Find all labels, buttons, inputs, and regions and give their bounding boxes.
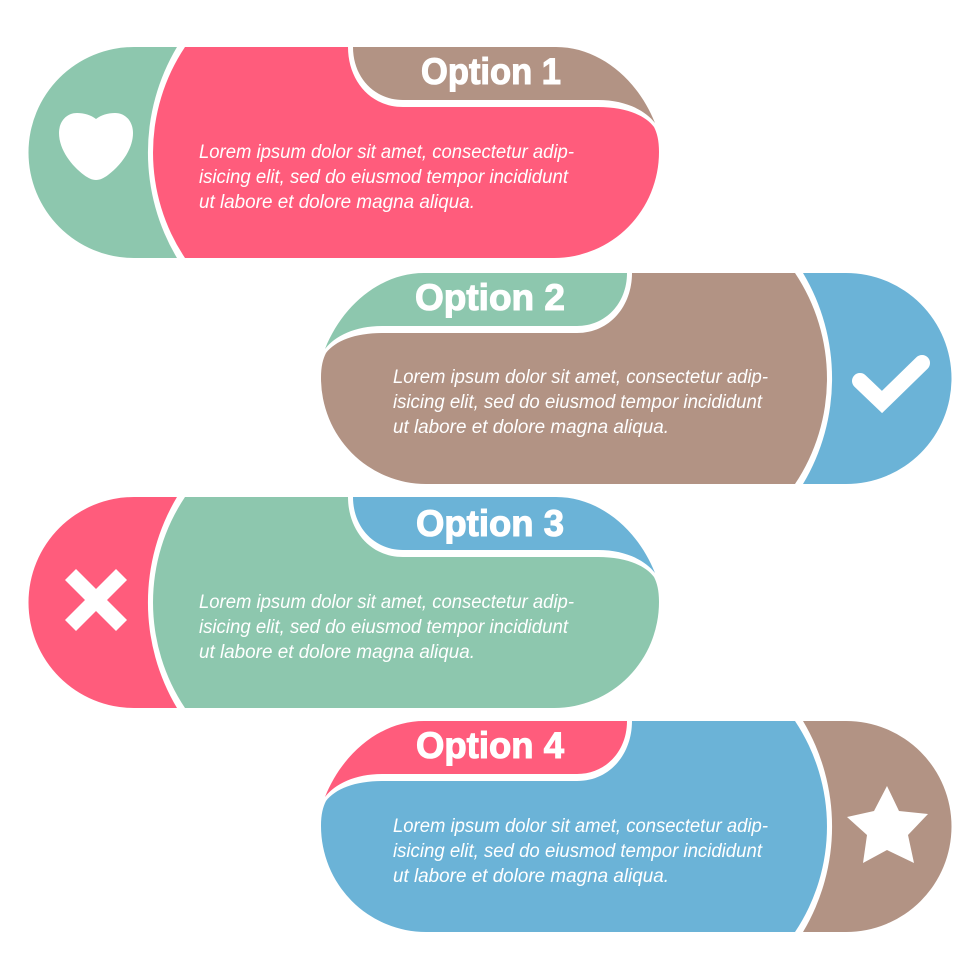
icon tab: green xyxy=(29,47,177,258)
body text: Lorem ipsum dolor sit amet, consectetur adip- xyxy=(393,366,768,388)
main body: green xyxy=(153,497,659,708)
panel: option 3 xyxy=(29,497,659,708)
body text: ut labore et dolore magna aliqua. xyxy=(199,641,475,663)
heading tab: brown xyxy=(353,47,655,123)
panel: option 1 xyxy=(29,47,659,258)
icon: star xyxy=(847,786,928,863)
heading tab: pink xyxy=(325,721,627,797)
heading: option 4: Option 4 xyxy=(416,725,564,766)
body text: ut labore et dolore magna aliqua. xyxy=(199,191,475,213)
heading: option 2: Option 2 xyxy=(415,277,565,318)
heading: option 3: Option 3 xyxy=(416,503,564,544)
body text: isicing elit, sed do eiusmod tempor incididunt xyxy=(393,840,764,862)
heading: option 1: Option 1 xyxy=(421,51,561,92)
icon: heart xyxy=(59,113,133,180)
body text: isicing elit, sed do eiusmod tempor incididunt xyxy=(199,166,570,188)
main body: brown xyxy=(321,273,827,484)
heading tab: blue xyxy=(353,497,655,573)
icon: cross xyxy=(65,569,127,631)
panel: option 2 xyxy=(321,273,952,484)
main body: blue xyxy=(321,721,827,932)
icon: check mark xyxy=(860,363,922,402)
icon tab: pink xyxy=(29,497,177,708)
body text: Lorem ipsum dolor sit amet, consectetur adip- xyxy=(199,141,574,163)
icon tab: blue xyxy=(803,273,952,484)
icon tab: brown xyxy=(803,721,952,932)
body text: ut labore et dolore magna aliqua. xyxy=(393,416,669,438)
body text: ut labore et dolore magna aliqua. xyxy=(393,865,669,887)
main body: pink xyxy=(153,47,659,258)
body text: Lorem ipsum dolor sit amet, consectetur adip- xyxy=(199,591,574,613)
panel: option 4 xyxy=(321,721,952,932)
body text: isicing elit, sed do eiusmod tempor incididunt xyxy=(199,616,570,638)
heading tab: green xyxy=(325,273,627,349)
body text: Lorem ipsum dolor sit amet, consectetur adip- xyxy=(393,815,768,837)
body text: isicing elit, sed do eiusmod tempor incididunt xyxy=(393,391,764,413)
